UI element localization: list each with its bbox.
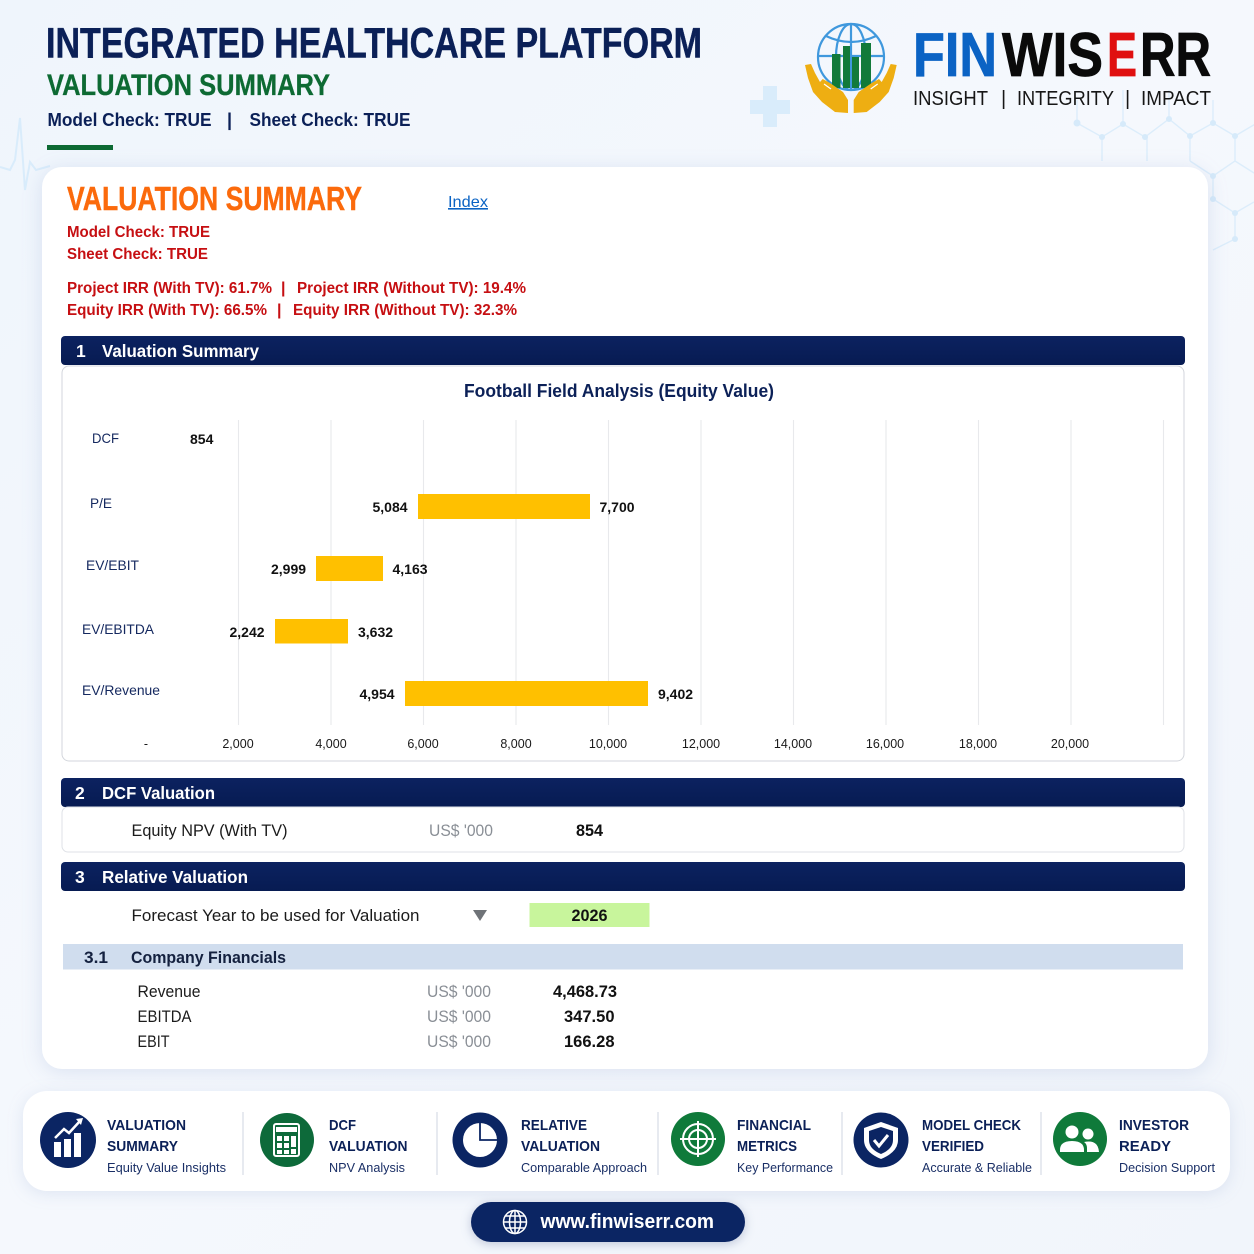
company financials table: 166.28 bbox=[564, 1033, 614, 1051]
forecast year selector: 2026 bbox=[572, 907, 608, 925]
feature: relative valuation bbox=[452, 1112, 647, 1175]
category labels: P/E bbox=[90, 495, 112, 511]
website pill bbox=[471, 1202, 745, 1242]
wordmark: RR bbox=[1140, 21, 1211, 90]
category labels bbox=[82, 430, 160, 698]
feature: DCF valuation bbox=[260, 1113, 408, 1175]
company financials table bbox=[138, 983, 617, 1051]
feature: relative valuation: Comparable Approach bbox=[521, 1160, 647, 1175]
model and sheet check status: Sheet Check: TRUE bbox=[250, 110, 410, 130]
chart: football field bbox=[62, 366, 1184, 761]
check status bbox=[67, 224, 210, 263]
category labels: EV/EBIT bbox=[86, 557, 139, 573]
website pill: www.finwiserr.com bbox=[540, 1211, 714, 1233]
value labels bbox=[190, 431, 693, 702]
IRR metrics bbox=[67, 280, 526, 319]
feature: valuation summary bbox=[40, 1112, 226, 1175]
section header 3 bbox=[61, 862, 1185, 891]
company financials table: EBITDA bbox=[138, 1008, 192, 1026]
green accent rule bbox=[47, 145, 113, 150]
feature: financial metrics bbox=[671, 1112, 833, 1175]
logo: Finwiserr bbox=[805, 21, 1211, 113]
x axis labels: 14,000 bbox=[774, 737, 812, 751]
feature: relative valuation: VALUATION bbox=[521, 1138, 600, 1155]
tagline: INSIGHT bbox=[913, 88, 988, 110]
check status: Model Check: TRUE bbox=[67, 224, 210, 241]
panel: main card bbox=[42, 167, 1208, 1069]
x axis labels: 10,000 bbox=[589, 737, 627, 751]
company financials table: 4,468.73 bbox=[553, 983, 617, 1001]
feature: DCF valuation: VALUATION bbox=[329, 1138, 408, 1155]
x axis labels: 18,000 bbox=[959, 737, 997, 751]
section header 3: Relative Valuation bbox=[102, 867, 248, 887]
subsection header 3.1: 3.1 bbox=[84, 949, 108, 967]
title: INTEGRATED HEALTHCARE PLATFORM bbox=[46, 20, 702, 68]
x axis labels: 16,000 bbox=[866, 737, 904, 751]
section header 1: Valuation Summary bbox=[102, 341, 259, 361]
feature: model check verified bbox=[854, 1112, 1032, 1175]
feature: investor ready: Decision Support bbox=[1119, 1160, 1215, 1175]
feature: DCF valuation: DCF bbox=[329, 1117, 356, 1134]
icon: growth chart bbox=[40, 1112, 96, 1168]
feature: investor ready: READY bbox=[1119, 1138, 1171, 1155]
subtitle: VALUATION SUMMARY bbox=[47, 69, 330, 102]
heading: VALUATION SUMMARY bbox=[67, 180, 362, 217]
check status: Sheet Check: TRUE bbox=[67, 246, 208, 263]
section header 1 bbox=[61, 336, 1185, 365]
icon: people bbox=[1053, 1112, 1107, 1166]
company financials table: Revenue bbox=[138, 983, 200, 1001]
company financials table: US$ '000 bbox=[427, 983, 491, 1001]
feature: DCF valuation: NPV Analysis bbox=[329, 1160, 405, 1175]
chart title: Football Field Analysis (Equity Value) bbox=[464, 381, 774, 401]
category labels: EV/Revenue bbox=[82, 682, 160, 698]
icon: dropdown arrow bbox=[473, 910, 487, 921]
feature: financial metrics: FINANCIAL bbox=[737, 1117, 811, 1134]
company financials table: EBIT bbox=[138, 1033, 170, 1051]
value labels: 4,163 bbox=[392, 561, 428, 577]
icon: target bbox=[671, 1112, 725, 1166]
background: plus sign bbox=[750, 86, 790, 127]
tagline: | bbox=[1125, 88, 1130, 110]
section header 2: DCF Valuation bbox=[102, 783, 215, 803]
icon: globe bbox=[504, 1210, 526, 1234]
company financials table: US$ '000 bbox=[427, 1008, 491, 1026]
value labels: 7,700 bbox=[600, 499, 635, 515]
IRR metrics: Equity IRR (Without TV): 32.3% bbox=[293, 302, 517, 319]
wordmark: E bbox=[1107, 21, 1137, 90]
subsection header 3.1: Company Financials bbox=[131, 949, 286, 967]
forecast year selector bbox=[132, 903, 650, 927]
icon: calculator bbox=[260, 1113, 314, 1167]
tagline bbox=[913, 88, 1211, 110]
feature: investor ready: INVESTOR bbox=[1119, 1117, 1189, 1134]
value labels: 3,632 bbox=[358, 624, 393, 640]
feature: financial metrics: METRICS bbox=[737, 1138, 797, 1155]
background: ECG line bbox=[0, 118, 50, 190]
value labels: 2,242 bbox=[230, 624, 265, 640]
x axis labels: 20,000 bbox=[1051, 737, 1089, 751]
x axis labels: - bbox=[144, 737, 148, 751]
wordmark: WIS bbox=[1002, 21, 1103, 90]
header: title block bbox=[46, 20, 702, 150]
feature: model check verified: Accurate & Reliable bbox=[922, 1160, 1032, 1175]
x axis labels bbox=[144, 737, 1089, 751]
value labels: 5,084 bbox=[372, 499, 408, 515]
IRR metrics: | bbox=[281, 280, 285, 297]
feature: financial metrics: Key Performance bbox=[737, 1160, 833, 1175]
IRR metrics: | bbox=[277, 302, 281, 319]
section header 2 bbox=[61, 778, 1185, 807]
feature: model check verified: VERIFIED bbox=[922, 1138, 984, 1155]
subsection header 3.1 bbox=[63, 944, 1183, 970]
icon: pie chart bbox=[452, 1112, 508, 1168]
wordmark bbox=[913, 21, 1211, 90]
feature: valuation summary: Equity Value Insights bbox=[107, 1160, 226, 1175]
tagline: | bbox=[1001, 88, 1006, 110]
x axis labels: 4,000 bbox=[315, 737, 347, 751]
wordmark: FIN bbox=[913, 21, 997, 90]
section header 1: 1 bbox=[76, 341, 86, 361]
company financials table: 347.50 bbox=[564, 1008, 614, 1026]
feature: investor ready bbox=[1053, 1112, 1215, 1175]
model and sheet check status: | bbox=[227, 110, 232, 130]
model and sheet check status: Model Check: TRUE bbox=[48, 110, 212, 130]
background: hexagon network bbox=[1074, 90, 1254, 250]
feature: model check verified: MODEL CHECK bbox=[922, 1117, 1021, 1134]
tagline: INTEGRITY bbox=[1017, 88, 1114, 110]
icon: shield check bbox=[854, 1112, 908, 1168]
panel: footer features bbox=[23, 1091, 1230, 1191]
value labels: 2,999 bbox=[271, 561, 306, 577]
feature: relative valuation: RELATIVE bbox=[521, 1117, 587, 1134]
value labels: 9,402 bbox=[658, 686, 693, 702]
DCF row: US$ '000 bbox=[429, 822, 493, 840]
IRR metrics: Project IRR (With TV): 61.7% bbox=[67, 280, 272, 297]
category labels: EV/EBITDA bbox=[82, 621, 155, 637]
value labels: 854 bbox=[190, 431, 214, 447]
value labels: 4,954 bbox=[360, 686, 395, 702]
feature: valuation summary: VALUATION bbox=[107, 1117, 186, 1134]
tagline: IMPACT bbox=[1141, 88, 1211, 110]
x axis labels: 6,000 bbox=[407, 737, 439, 751]
section header 3: 3 bbox=[75, 867, 85, 887]
feature: valuation summary: SUMMARY bbox=[107, 1138, 178, 1155]
x axis labels: 8,000 bbox=[500, 737, 532, 751]
icon: globe with bars in hands bbox=[805, 24, 897, 113]
company financials table: US$ '000 bbox=[427, 1033, 491, 1051]
DCF row: Equity NPV (With TV) bbox=[132, 822, 288, 840]
bars bbox=[275, 494, 648, 706]
x axis labels: 2,000 bbox=[222, 737, 254, 751]
x axis labels: 12,000 bbox=[682, 737, 720, 751]
IRR metrics: Project IRR (Without TV): 19.4% bbox=[297, 280, 526, 297]
category labels: DCF bbox=[92, 430, 119, 446]
IRR metrics: Equity IRR (With TV): 66.5% bbox=[67, 302, 267, 319]
model and sheet check status bbox=[48, 110, 410, 130]
DCF row bbox=[62, 807, 1184, 852]
section header 2: 2 bbox=[75, 783, 85, 803]
DCF row: 854 bbox=[576, 822, 604, 840]
panel heading block bbox=[67, 180, 526, 319]
forecast year selector: Forecast Year to be used for Valuation bbox=[132, 907, 420, 925]
index link: Index bbox=[448, 194, 488, 211]
